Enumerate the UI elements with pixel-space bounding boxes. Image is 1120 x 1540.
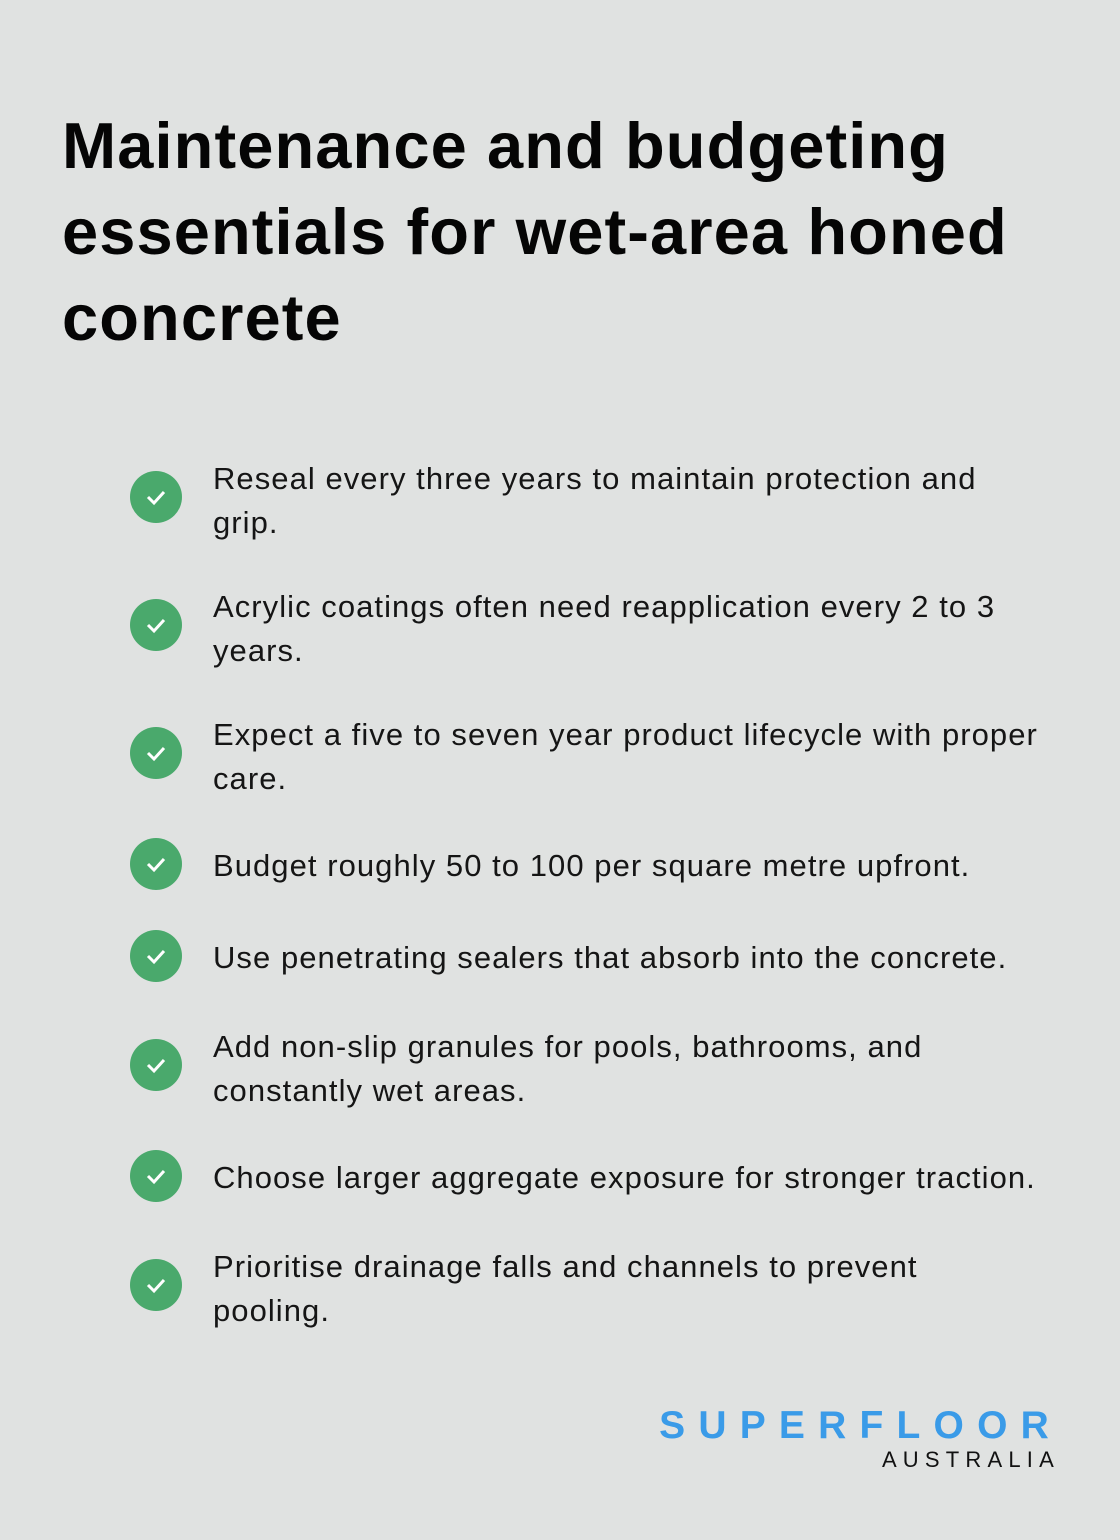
logo: AUSTRALIA — [882, 1447, 1060, 1472]
item 4: Budget roughly 50 to 100 per square metre upfront. — [213, 848, 970, 883]
item 7 — [130, 1150, 1036, 1202]
item 1: Reseal every three years to maintain protection and — [213, 461, 976, 496]
checklist — [130, 461, 1038, 1328]
item 1 — [130, 461, 976, 540]
title: Maintenance and budgeting — [62, 109, 949, 182]
item 3: care. — [213, 761, 287, 796]
item 3 — [130, 717, 1038, 796]
item 2: years. — [213, 633, 304, 668]
logo — [659, 1404, 1062, 1472]
item 1: grip. — [213, 505, 279, 540]
item 6 — [130, 1029, 922, 1108]
logo: SUPERFLOOR — [659, 1404, 1062, 1447]
title: essentials for wet-area honed — [62, 195, 1008, 268]
item 8 — [130, 1249, 918, 1328]
item 8: pooling. — [213, 1293, 330, 1328]
item 2: Acrylic coatings often need reapplication every 2 to 3 — [213, 589, 995, 624]
item 2 — [130, 589, 995, 668]
item 8: Prioritise drainage falls and channels to prevent — [213, 1249, 918, 1284]
item 3: Expect a five to seven year product lifecycle with proper — [213, 717, 1038, 752]
item 5: Use penetrating sealers that absorb into the concrete. — [213, 940, 1007, 975]
item 7: Choose larger aggregate exposure for stronger traction. — [213, 1160, 1036, 1195]
item 6: Add non-slip granules for pools, bathrooms, and — [213, 1029, 922, 1064]
title: concrete — [62, 281, 342, 354]
item 4 — [130, 838, 970, 890]
title — [62, 109, 1008, 354]
item 5 — [130, 930, 1007, 982]
item 6: constantly wet areas. — [213, 1073, 526, 1108]
